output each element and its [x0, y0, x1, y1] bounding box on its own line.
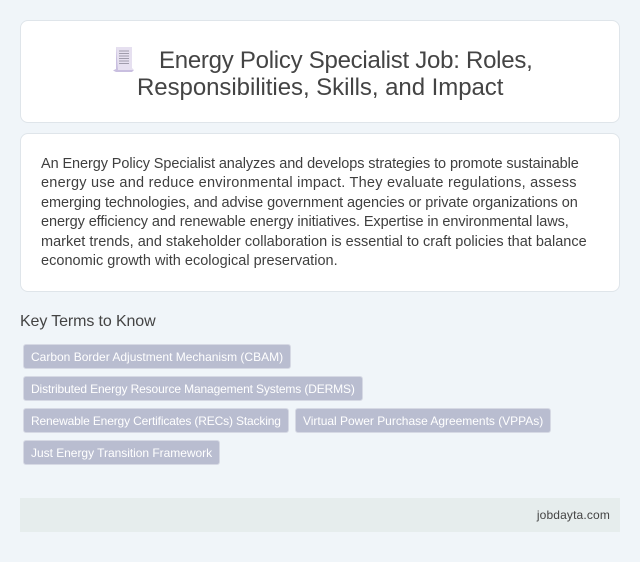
description card — [20, 133, 620, 292]
title: Responsibilities, Skills, and Impact — [137, 74, 503, 101]
description text — [41, 156, 587, 269]
description text: market trends, and stakeholder collaboration is essential to craft policies that balance — [41, 234, 587, 250]
description text: energy use and reduce environmental impact. They evaluate regulations, assess — [41, 175, 577, 191]
heading: key terms: Key Terms to Know — [20, 313, 156, 330]
description text: An Energy Policy Specialist analyzes and develops strategies to promote sustainable — [41, 156, 579, 172]
title — [137, 47, 532, 101]
tag: RECs — [23, 408, 289, 433]
tag: VPPAs: Virtual Power Purchase Agreements (VPPAs) — [303, 414, 543, 428]
footer bar — [20, 498, 620, 532]
tag: just transition — [23, 440, 220, 465]
tag: RECs: Renewable Energy Certificates (RECs) Stacking — [31, 414, 281, 428]
title card — [20, 20, 620, 123]
tag: CBAM: Carbon Border Adjustment Mechanism (CBAM) — [31, 350, 283, 364]
description text: economic growth with ecological preservation. — [41, 253, 338, 269]
description text: energy efficiency and renewable energy initiatives. Expertise in environmental laws, — [41, 214, 569, 230]
term tags — [23, 344, 551, 465]
footer source: jobdayta.com — [537, 508, 610, 522]
title: Energy Policy Specialist Job: Roles, — [159, 47, 532, 74]
tag: DERMS — [23, 376, 363, 401]
tag: VPPAs — [295, 408, 551, 433]
tag: DERMS: Distributed Energy Resource Management Systems (DERMS) — [31, 382, 355, 396]
description text: emerging technologies, and advise government agencies or private organizations on — [41, 195, 578, 211]
tag: just transition: Just Energy Transition Framework — [31, 446, 212, 460]
tag: CBAM — [23, 344, 291, 369]
icon: document scroll — [113, 47, 134, 72]
